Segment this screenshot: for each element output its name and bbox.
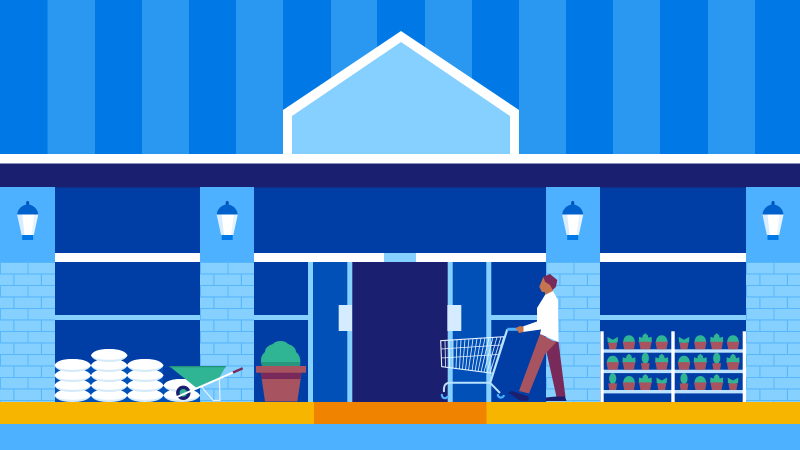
icon: lamp 1 — [17, 201, 38, 240]
storefront wall and windows — [0, 188, 800, 402]
wheelbarrow — [169, 366, 243, 400]
icon: lamp 2 — [217, 201, 238, 240]
hand — [516, 326, 524, 333]
window mullions — [55, 315, 746, 320]
window header band — [55, 253, 746, 262]
brick pillar 3 — [546, 187, 600, 402]
shelf row 2 plants — [606, 353, 740, 370]
pediment gable — [283, 31, 519, 164]
front leg — [519, 334, 556, 394]
person pushing cart — [508, 274, 566, 401]
roof trim band — [0, 154, 800, 188]
potted plant — [256, 341, 306, 402]
brick pillar 2 — [200, 187, 254, 402]
plant shelves — [600, 331, 746, 402]
back leg — [546, 340, 566, 397]
brick pillar 4 — [746, 187, 800, 402]
brick pillar 1 — [0, 187, 55, 402]
ground walkway — [0, 402, 800, 450]
hair — [543, 274, 557, 290]
icon: lamp 3 — [562, 201, 583, 240]
shelf row 3 plants — [608, 373, 738, 390]
roof stripes — [0, 0, 800, 156]
icon: lamp 4 — [762, 201, 784, 240]
sacks pile — [54, 349, 200, 402]
shoes — [508, 391, 566, 401]
shopping cart — [441, 329, 520, 398]
entrance doors — [308, 262, 491, 402]
neck and face — [539, 277, 553, 297]
shirt and arm — [523, 291, 558, 342]
shelf row 1 plants — [607, 333, 739, 349]
